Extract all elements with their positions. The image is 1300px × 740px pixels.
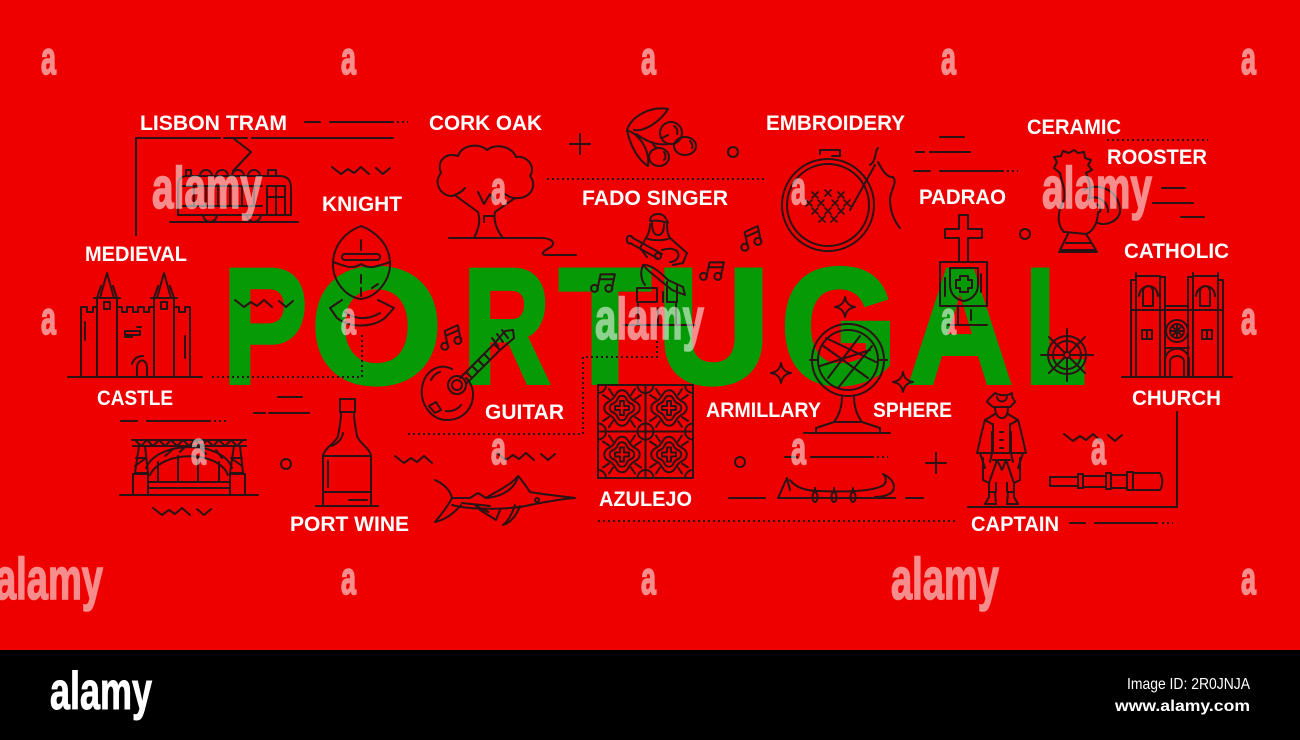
icon: cork oak tree [438,146,533,238]
icon: ship wheel [1041,329,1093,381]
icon: medieval castle [68,273,202,377]
icon: ceramic rooster [1054,150,1120,252]
icon: boat [778,474,895,502]
icon: music notes [438,226,763,350]
label: ARMILLARY: ARMILLARY [706,399,821,422]
watermarks: a [341,32,356,84]
icon: catholic church [1122,273,1232,377]
watermarks [0,32,1256,612]
title: PORTUGAL: L [1027,237,1085,415]
icon: luis bridge [120,440,258,495]
watermarks: alamy [595,287,704,352]
title: PORTUGAL: O [311,234,442,418]
label: CASTLE: CASTLE [97,387,173,410]
watermarks: a [641,552,656,604]
icon: port wine bottle [316,399,378,506]
icon: olive branch [627,108,696,166]
watermarks: a [191,422,206,474]
label: AZULEJO: AZULEJO [599,488,692,511]
watermarks: a [491,422,506,474]
label: ROOSTER: ROOSTER [1107,146,1207,169]
watermarks: a [1091,422,1106,474]
label: GUITAR: GUITAR [485,401,564,424]
label: CATHOLIC: CATHOLIC [1124,240,1229,263]
icon: azulejo tile [598,385,693,478]
icon: embroidery hoop [782,148,900,251]
watermarks: a [1241,32,1256,84]
title: PORTUGAL: G [781,234,897,418]
label: SPHERE: SPHERE [873,399,952,422]
watermarks: a [41,292,56,344]
watermarks: a [941,32,956,84]
icon: padrao monument [940,215,987,325]
label: CORK OAK: CORK OAK [429,112,542,135]
footer logo: alamy: alamy [50,662,152,721]
icon: fado singer [623,214,695,325]
title: PORTUGAL: A [907,234,1013,418]
title: PORTUGAL: T [560,236,650,417]
label: PADRAO: PADRAO [919,186,1006,209]
label: KNIGHT: KNIGHT [322,193,402,216]
watermarks: a [641,32,656,84]
footer bar [0,650,1300,740]
watermarks: a [41,32,56,84]
icon: portuguese guitar [422,330,514,420]
label: EMBROIDERY: EMBROIDERY [766,112,905,135]
title: PORTUGAL [222,234,1085,420]
label: PORT WINE: PORT WINE [290,513,409,536]
watermarks: a [341,292,356,344]
watermarks: a [341,552,356,604]
watermarks: a [941,292,956,344]
watermarks: a [1241,552,1256,604]
watermarks: a [491,162,506,214]
watermarks: a [1241,292,1256,344]
label: FADO SINGER: FADO SINGER [582,187,728,210]
watermarks: alamy [152,156,262,221]
icon: spyglass [1050,472,1162,490]
title: PORTUGAL: P [222,234,308,420]
watermarks: alamy [891,547,999,612]
icon: knight helmet [330,226,394,326]
icon: lisbon tram [170,138,298,222]
title: PORTUGAL: R [463,234,550,418]
title: PORTUGAL: U [658,236,769,417]
label: CAPTAIN: CAPTAIN [971,513,1059,536]
decorative zigzags [153,134,1122,515]
icon: captain figure [977,393,1026,504]
footer url: www.alamy.com [1114,698,1250,715]
watermarks: a [791,422,806,474]
icon: marlin fish [435,476,575,525]
label: CERAMIC: CERAMIC [1027,116,1121,139]
watermarks: alamy [1042,156,1152,221]
footer image id: Image ID: 2R0JNJA [1127,676,1250,693]
label: MEDIEVAL: MEDIEVAL [85,243,187,266]
watermarks: a [791,162,806,214]
label: LISBON TRAM: LISBON TRAM [140,112,287,135]
icon: armillary sphere [804,324,890,433]
label: CHURCH: CHURCH [1132,387,1221,410]
